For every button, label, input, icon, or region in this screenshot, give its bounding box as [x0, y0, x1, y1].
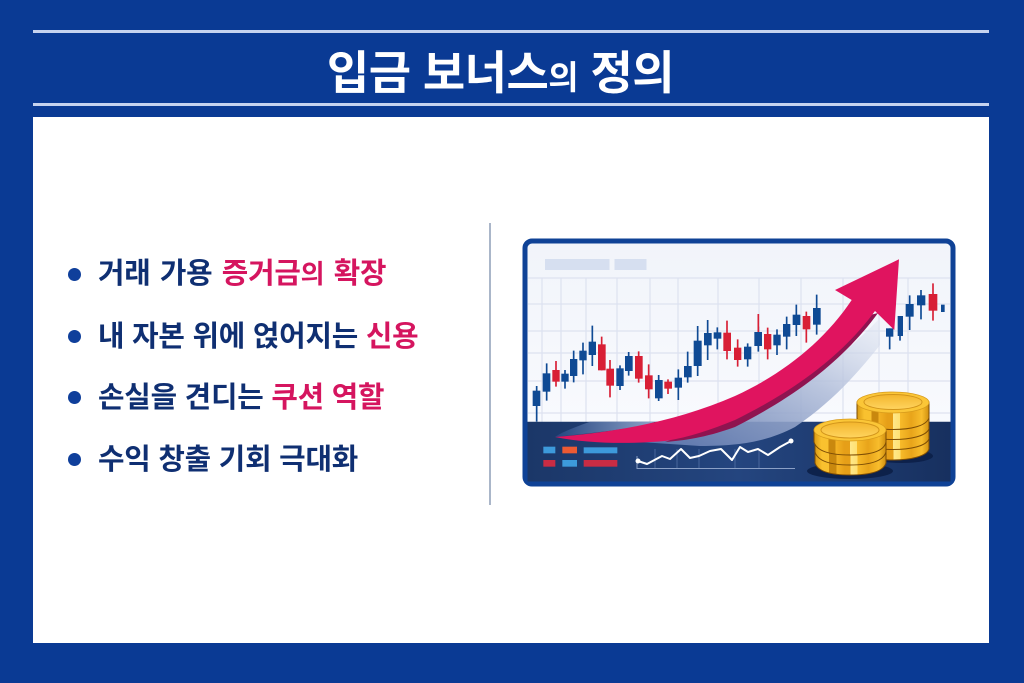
bottom title rule: [33, 103, 989, 106]
red candles: [552, 321, 731, 398]
white content panel: [33, 117, 989, 643]
vertical divider: [489, 223, 491, 505]
panel frame: [525, 241, 953, 484]
streak above arrow on band: [555, 422, 655, 437]
rising arrow: [555, 259, 899, 443]
bullet item 4: 수익 창출 기회 극대화: [98, 444, 358, 476]
bullet item 1: 거래 가용 증거금의 확장: [98, 258, 386, 290]
front stack: [814, 419, 886, 475]
bullet item 3: 손실을 견디는 쿠션 역할: [98, 382, 384, 414]
red candles: [734, 283, 937, 367]
legend swatches: [543, 447, 617, 467]
grid: [528, 278, 950, 422]
blue candles: [744, 290, 945, 367]
header placeholders: [545, 259, 646, 270]
mini line chart: [636, 438, 795, 468]
coin shadow: [807, 463, 893, 479]
bullet list: [68, 258, 418, 476]
back stack: [857, 392, 929, 460]
candlesticks left: [533, 320, 731, 467]
blue candles: [533, 320, 721, 422]
top rule: [33, 30, 989, 33]
coin stacks: [807, 392, 933, 479]
candlesticks right: [734, 283, 945, 367]
bullet item 2: 내 자본 위에 얹어지는 신용: [98, 321, 418, 353]
arrow dark edge: [665, 313, 878, 442]
title: 입금 보너스의 정의: [327, 47, 674, 99]
arrow body: [555, 259, 899, 443]
dark lower band: [528, 422, 950, 482]
arrow shadow: [640, 318, 880, 446]
